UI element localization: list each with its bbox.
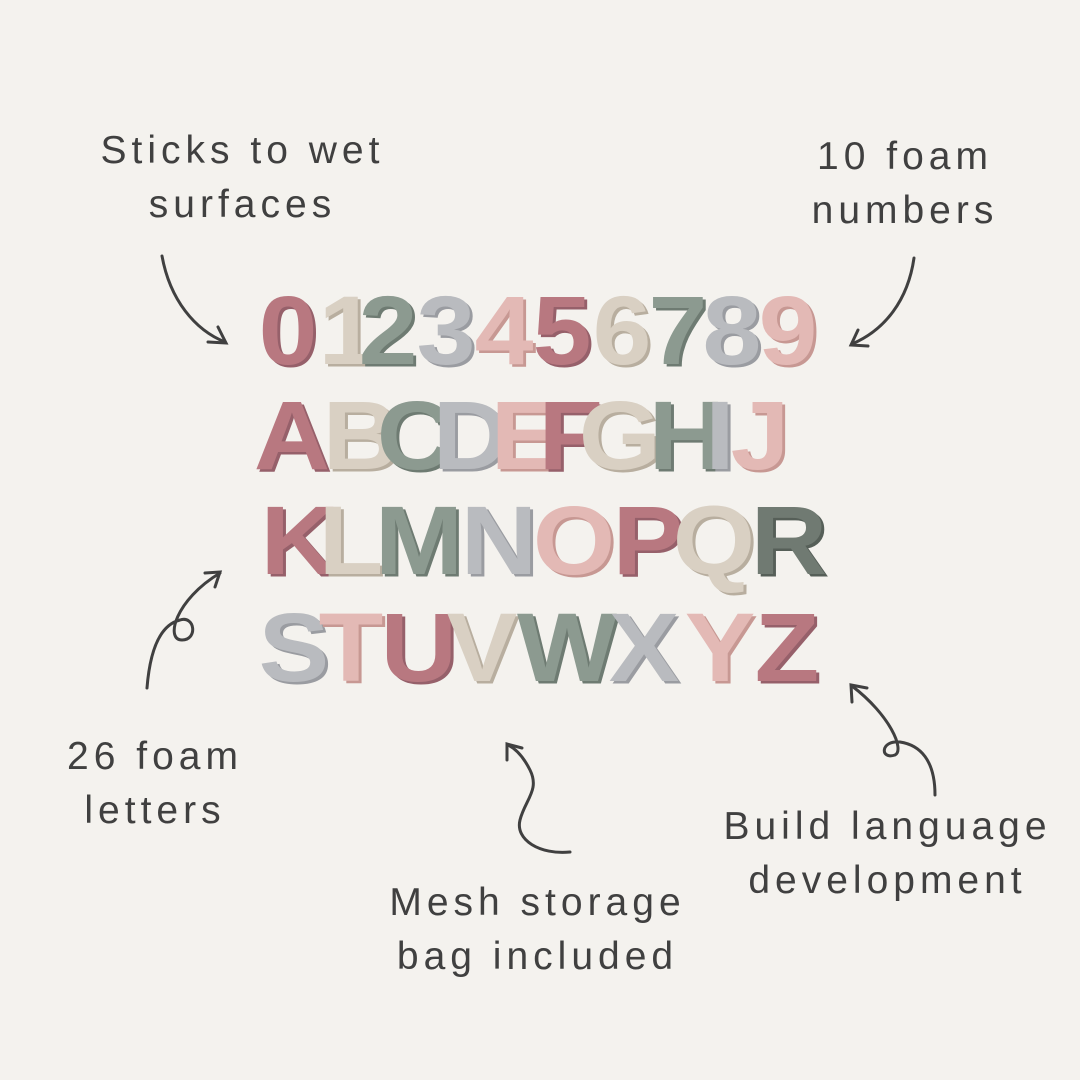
letter grid: O <box>533 486 615 595</box>
letter grid: R <box>751 486 827 595</box>
label: 10 foam numbers <box>812 135 998 232</box>
letter grid: 3 <box>417 276 475 385</box>
label: sticks to wet surfaces: Sticks to wet <box>101 129 384 172</box>
letter grid: A <box>254 381 330 490</box>
letter grid: U <box>381 593 457 702</box>
row: numbers <box>259 276 817 385</box>
label: build language development <box>723 805 1052 902</box>
letter grid: W <box>517 593 617 702</box>
arrow: mesh bag <box>507 744 570 852</box>
letter grid: K <box>261 486 337 595</box>
letter grid: 6 <box>593 276 651 385</box>
letter grid: Y <box>685 593 755 702</box>
row: S-Z <box>259 593 820 702</box>
letter grid: X <box>609 593 679 702</box>
row: A-J <box>254 381 789 490</box>
letter grid: L <box>319 486 383 595</box>
letter grid: M <box>375 486 463 595</box>
label: build language development: Build language <box>723 805 1052 848</box>
arrow: sticks <box>162 256 226 343</box>
label: mesh storage bag: bag included <box>397 935 678 978</box>
letter grid: C <box>377 381 453 490</box>
arrow: numbers <box>851 258 914 346</box>
letter grid: 9 <box>759 276 817 385</box>
letter grid: 1 <box>318 276 377 385</box>
label: 26 foam letters <box>67 735 243 832</box>
letter grid: 7 <box>649 276 707 385</box>
letter grid: H <box>649 381 725 490</box>
letter grid: 0 <box>259 276 317 385</box>
label: sticks to wet surfaces: surfaces <box>149 183 336 226</box>
arrow: letters <box>147 572 220 688</box>
letter grid: N <box>461 486 537 595</box>
letter grid: 2 <box>359 276 417 385</box>
letter grid: J <box>731 381 789 490</box>
letter grid: P <box>613 486 683 595</box>
letter grid: G <box>579 381 661 490</box>
letter grid: 4 <box>475 276 533 385</box>
label: 26 foam letters: 26 foam <box>67 735 243 778</box>
label: 26 foam letters: letters <box>84 789 226 832</box>
label: 10 foam numbers: 10 foam <box>817 135 993 178</box>
letter grid: I <box>705 381 735 490</box>
arrow: build language <box>851 685 935 795</box>
letter grid: 5 <box>533 276 591 385</box>
letter grid: B <box>323 381 399 490</box>
letter grid: F <box>539 381 603 490</box>
letter grid <box>254 276 828 702</box>
letter grid: Q <box>673 486 755 595</box>
letter grid: 8 <box>703 276 761 385</box>
label: build language development: development <box>748 859 1027 902</box>
letter grid: E <box>491 381 561 490</box>
label: mesh storage bag: Mesh storage <box>389 881 686 924</box>
label: sticks to wet surfaces <box>101 129 384 226</box>
row: K-R <box>261 486 828 596</box>
label: 10 foam numbers: numbers <box>812 189 998 232</box>
letter grid: D <box>433 381 509 490</box>
letter grid: V <box>447 593 517 702</box>
letter grid: T <box>319 593 383 702</box>
label: mesh storage bag <box>389 881 686 978</box>
letter grid: S <box>259 593 329 702</box>
letter grid: Z <box>755 593 819 702</box>
